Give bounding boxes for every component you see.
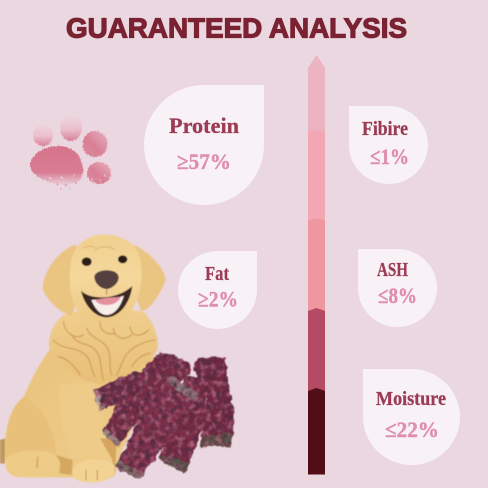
panel: moisture: ≤22% xyxy=(385,417,439,442)
title: GUARANTEED ANALYSIS xyxy=(66,12,407,44)
panel: fat: ≥2% xyxy=(198,286,238,312)
icon: paw print xyxy=(30,115,111,190)
panel: fibire: ≤1% xyxy=(370,144,409,169)
panel: fat xyxy=(178,251,257,329)
panel: ash xyxy=(358,249,437,327)
panel: fibire: Fibire xyxy=(362,118,408,140)
illustration: meat sticks xyxy=(93,352,234,479)
panel: ash: ASH xyxy=(377,259,408,281)
panel: ash: ≤8% xyxy=(378,283,417,308)
panel: moisture xyxy=(363,369,460,465)
panel: moisture: Moisture xyxy=(376,388,446,410)
panel: protein xyxy=(144,85,264,205)
panel: fat: Fat xyxy=(205,263,229,285)
panel: protein: Protein xyxy=(169,113,239,138)
panel: protein: ≥57% xyxy=(177,149,231,174)
illustration: golden retriever xyxy=(0,235,166,482)
chart: vertical arrow bar xyxy=(308,55,325,474)
panel: fibire xyxy=(349,106,428,184)
